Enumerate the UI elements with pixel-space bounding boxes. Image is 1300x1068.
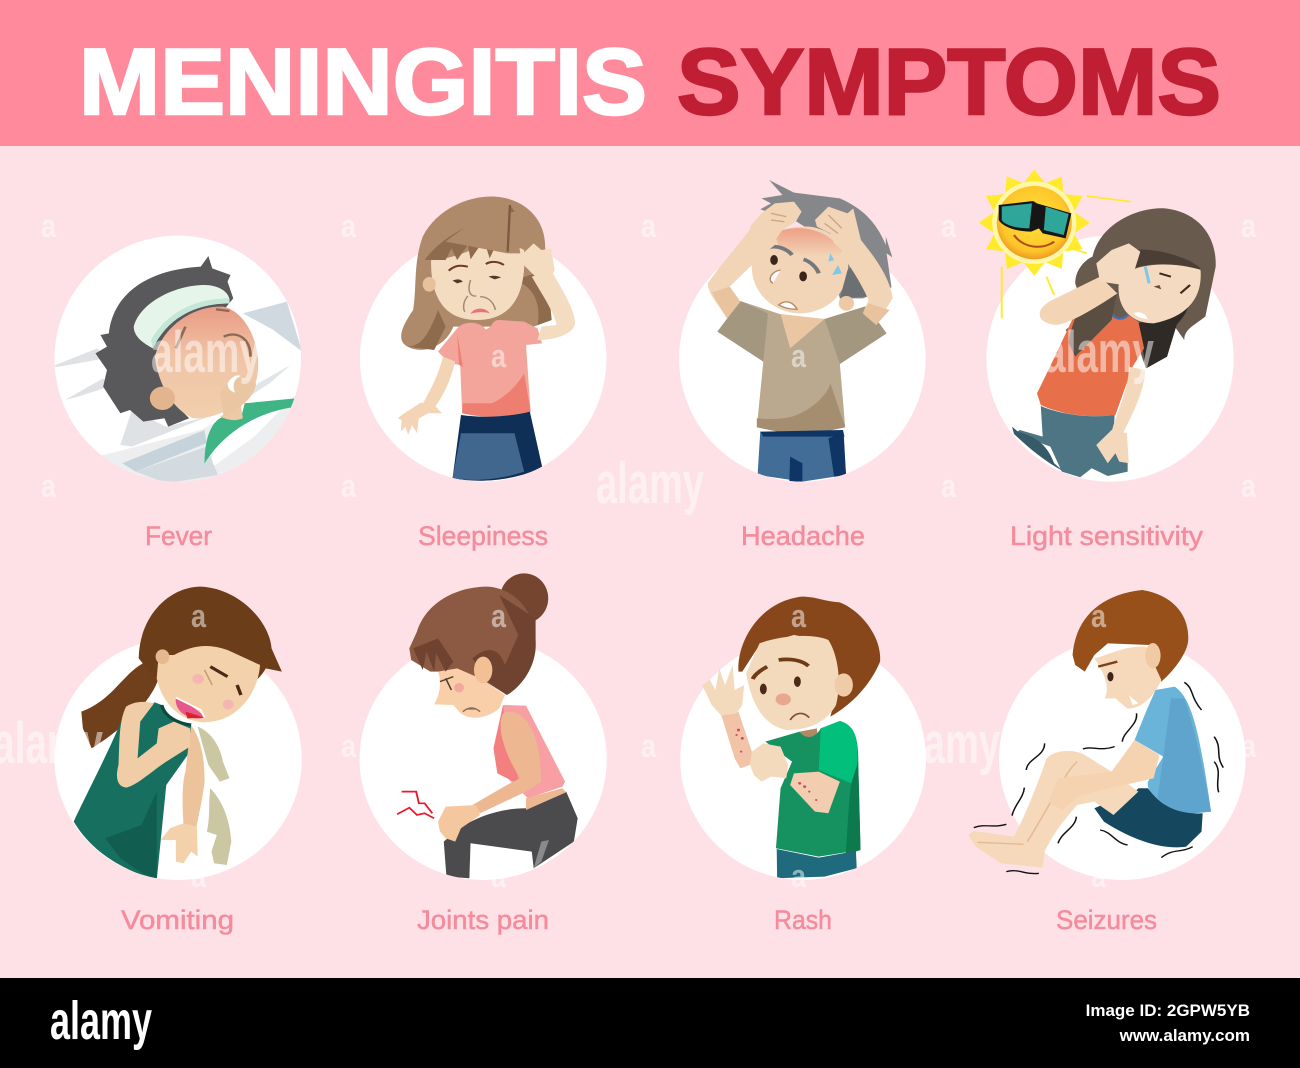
hair [139, 587, 282, 684]
pants [444, 792, 578, 878]
shirt [765, 721, 861, 857]
panel: joints pain [360, 573, 607, 880]
watermark: a [191, 598, 206, 634]
website: www.alamy.com [1119, 1026, 1250, 1045]
watermark: a [791, 338, 806, 374]
face [431, 248, 524, 320]
label: sleepiness: Sleepiness [418, 521, 548, 551]
title: MENINGITIS [79, 29, 647, 134]
towel [134, 285, 230, 348]
shorts [758, 430, 846, 482]
label: seizures: Seizures [1056, 905, 1157, 935]
vomit [198, 727, 231, 865]
panel: fever [55, 236, 304, 487]
rash spots [735, 729, 817, 801]
panel: light sensitivity [979, 169, 1234, 482]
hands [750, 202, 802, 238]
watermark: alamy [596, 451, 704, 516]
head [752, 227, 848, 313]
watermark: a [191, 858, 206, 894]
face [1119, 265, 1201, 323]
face [746, 636, 839, 730]
watermark: a [641, 208, 656, 244]
watermark: a [341, 208, 356, 244]
watermark: a [941, 208, 956, 244]
label: light sensitivity: Light sensitivity [1010, 521, 1204, 551]
watermark: a [641, 728, 656, 764]
face [157, 646, 260, 722]
shorts [1094, 788, 1203, 847]
watermark: a [41, 208, 56, 244]
hair back [401, 197, 552, 350]
panel: headache [679, 180, 926, 482]
dress [74, 702, 191, 880]
label: rash: Rash [774, 905, 832, 935]
hair strand [1069, 290, 1117, 357]
watermark: alamy [892, 711, 1000, 776]
watermark: a [491, 598, 506, 634]
label: joints pain: Joints pain [417, 905, 549, 935]
arms [1112, 367, 1145, 433]
watermark: a [1241, 208, 1256, 244]
footer bar [0, 978, 1300, 1068]
jeans [1014, 406, 1128, 477]
hair [1066, 208, 1216, 368]
shirt [1135, 687, 1211, 815]
labels [121, 521, 1204, 935]
watermark: a [941, 468, 956, 504]
watermark: a [1241, 728, 1256, 764]
hair [409, 587, 536, 695]
shirt [438, 320, 542, 417]
face [434, 668, 505, 718]
hair [760, 180, 892, 298]
shirt [205, 398, 296, 463]
watermark: a [791, 858, 806, 894]
watermark: a [1091, 858, 1106, 894]
hair [95, 256, 233, 427]
hair [738, 597, 880, 717]
face [155, 307, 258, 418]
header banner [0, 0, 1300, 146]
panel: vomiting [55, 587, 302, 880]
watermark [0, 208, 1256, 894]
watermark: a [41, 468, 56, 504]
arms and hands [721, 712, 754, 768]
shirt [1037, 313, 1144, 416]
ear and mouth [150, 387, 175, 410]
face detail [769, 247, 819, 273]
face [1094, 646, 1161, 708]
arm [472, 712, 541, 813]
panel: seizures [968, 590, 1246, 880]
shorts [453, 412, 542, 481]
icon: tremor lines [974, 682, 1223, 874]
watermark: a [791, 598, 806, 634]
title: SYMPTOMS [677, 29, 1221, 134]
hair bun [500, 573, 548, 623]
arms [423, 356, 456, 406]
hair [1073, 590, 1188, 682]
watermark: a [491, 858, 506, 894]
footer logo: alamy [50, 991, 152, 1051]
top [493, 705, 565, 798]
watermark: a [341, 728, 356, 764]
watermark: a [1241, 468, 1256, 504]
arms [708, 227, 775, 318]
shorts [777, 849, 857, 878]
arms [1048, 740, 1159, 810]
watermark: a [1091, 598, 1106, 634]
label: vomiting: Vomiting [121, 905, 234, 935]
ponytail [81, 660, 159, 748]
panel: rash [680, 597, 926, 880]
label: fever: Fever [145, 521, 212, 551]
image id: Image ID: 2GPW5YB [1086, 1001, 1250, 1020]
watermark: a [341, 468, 356, 504]
label: headache: Headache [741, 521, 865, 551]
arms [183, 725, 205, 828]
title [79, 29, 1221, 134]
watermark: alamy [151, 320, 261, 385]
legs and feet [968, 751, 1138, 868]
shirt [717, 301, 887, 437]
icon: sun with sunglasses [979, 169, 1131, 318]
icon: pain zigzag [397, 792, 434, 818]
watermark: a [491, 338, 506, 374]
panel: sleepiness [360, 197, 606, 482]
watermark: alamy [1044, 320, 1154, 385]
